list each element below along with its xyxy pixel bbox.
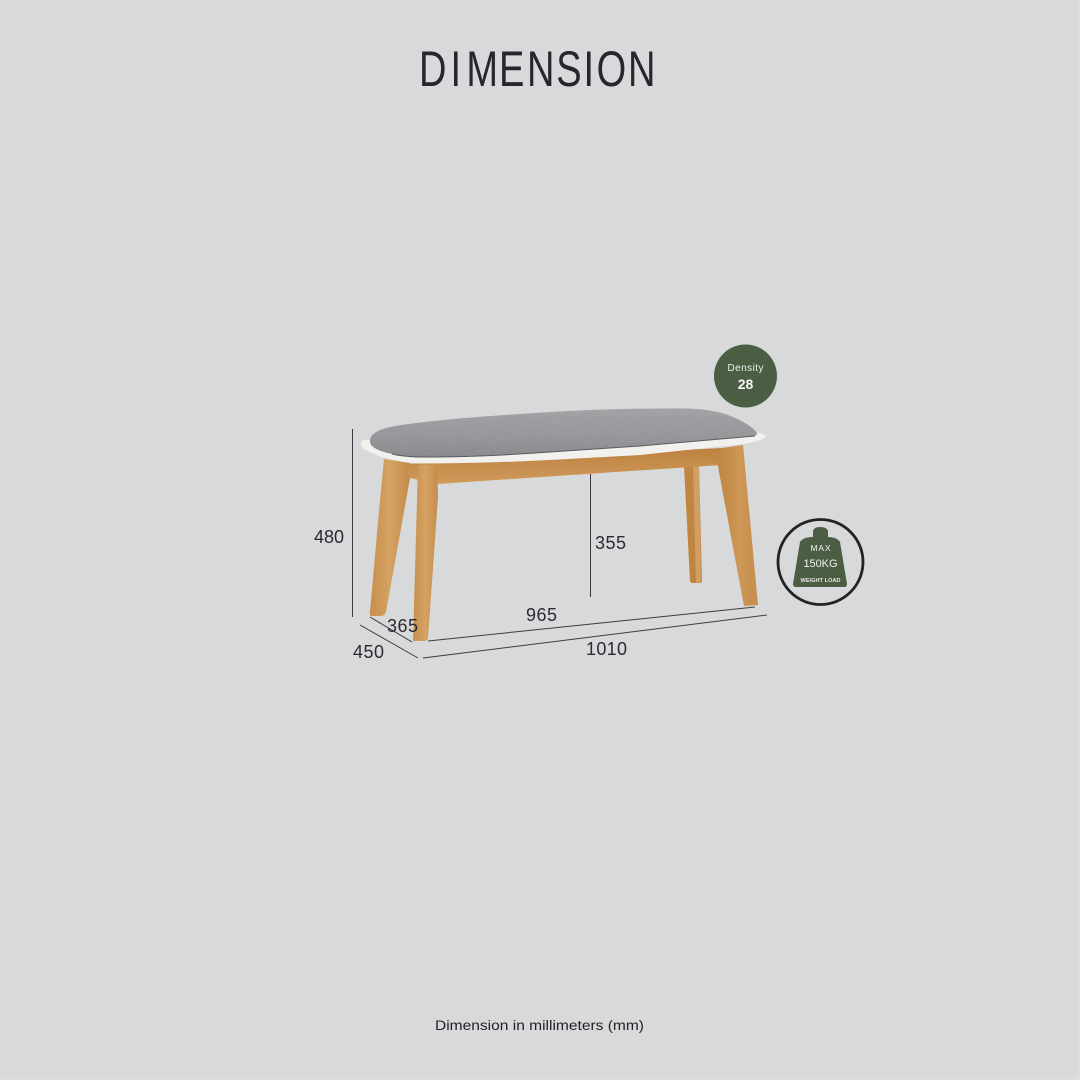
- dimension lines: [352, 429, 767, 658]
- dimension labels: 365: [387, 616, 418, 636]
- badge: max weight load: WEIGHT LOAD: [800, 578, 841, 584]
- title: DIMENSION: [419, 42, 655, 97]
- cushion shadow line: [392, 436, 755, 457]
- badge: max weight load: 150KG: [804, 558, 838, 570]
- grey cushion: [370, 408, 757, 457]
- back right leg: [684, 465, 702, 583]
- dimension labels: 1010: [586, 639, 627, 659]
- dimension labels: 450: [353, 642, 384, 662]
- badge: density: [714, 344, 777, 408]
- badge: max weight load: [778, 520, 863, 604]
- footnote: Dimension in millimeters (mm): [435, 1018, 644, 1033]
- badge: max weight load: MAX: [810, 543, 831, 553]
- dimension labels: 480: [314, 527, 344, 547]
- dimension labels: 965: [526, 605, 557, 625]
- white seat tray: [361, 433, 765, 464]
- badge: density: Density: [728, 363, 764, 374]
- badge: density: 28: [738, 376, 753, 392]
- dimension labels: [314, 527, 627, 662]
- illustration: bench: [361, 408, 765, 641]
- front right leg: [718, 445, 758, 606]
- front left leg: [413, 464, 438, 641]
- back left leg: [370, 459, 410, 616]
- apron rail: [405, 448, 722, 484]
- icon: weight: [793, 527, 847, 587]
- dimension labels: 355: [595, 533, 626, 553]
